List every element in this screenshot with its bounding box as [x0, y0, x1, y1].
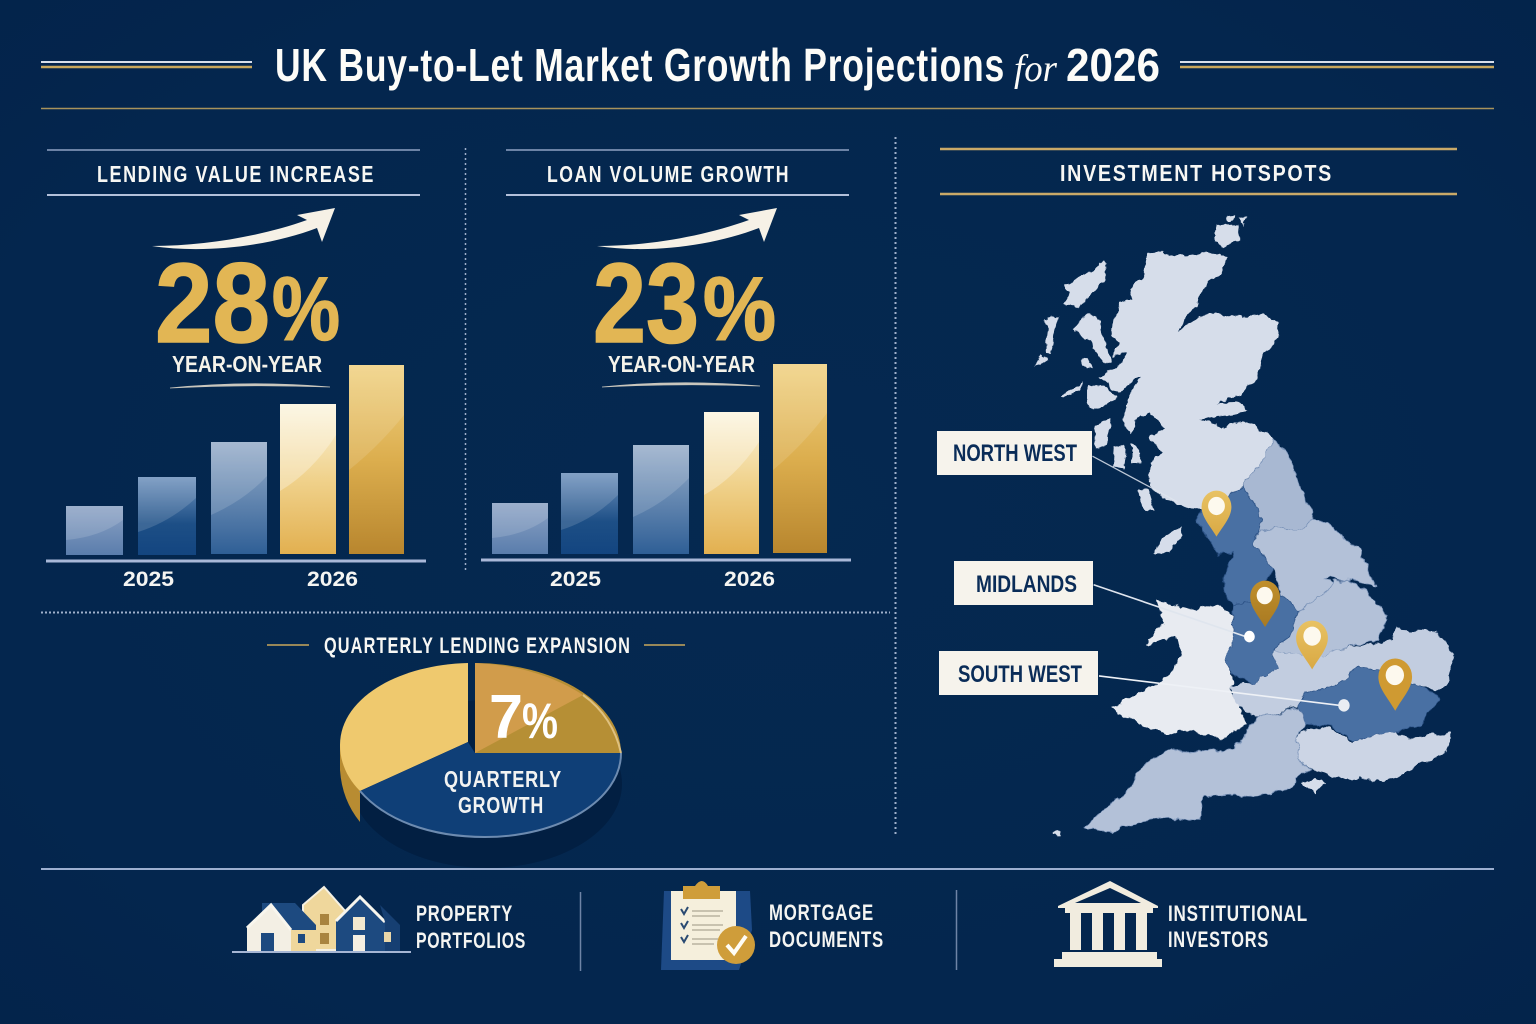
map region: South West [1084, 708, 1309, 831]
panel: quarterly lending expansion [267, 633, 685, 868]
footer: mortgage documents [661, 881, 884, 970]
stat: 28% [155, 240, 340, 366]
text: mortgage documents: MORTGAGE [769, 900, 874, 925]
title: 2026 [1066, 39, 1160, 91]
icon: houses [232, 887, 411, 953]
pin: Midlands [1250, 581, 1280, 627]
title: UK Buy-to-Let Market Growth Projections [275, 39, 1005, 91]
map region: South East coast [1296, 729, 1450, 781]
map: UK [1035, 216, 1455, 835]
map region: London and South East highlighted [1298, 666, 1440, 741]
bar chart: volume [481, 364, 851, 591]
bar chart: lending: 2025 [123, 568, 174, 591]
arrow: lending growth [152, 208, 335, 249]
footer: institutional investors [1054, 881, 1308, 967]
pie chart [340, 663, 622, 868]
bar chart: volume: 2025 [550, 568, 601, 591]
map region: Scotland [1099, 251, 1278, 509]
icon: temple [1054, 881, 1162, 967]
caption: year-on-year: YEAR-ON-YEAR [608, 351, 755, 377]
leader line: Midlands [1094, 585, 1255, 642]
map region: North West highlighted [1197, 486, 1273, 604]
panel: loan volume growth [481, 150, 851, 591]
caption: year-on-year: YEAR-ON-YEAR [172, 351, 322, 377]
map: islands [1035, 216, 1326, 835]
caption: quarterly growth: QUARTERLY [444, 766, 562, 792]
stat: 7% [489, 683, 558, 752]
stat: 23%: % [703, 260, 776, 360]
pin: East Midlands [1296, 621, 1328, 669]
map region: Wales [1111, 601, 1247, 739]
label: North West [937, 431, 1092, 475]
map region: Yorkshire [1254, 519, 1375, 610]
map: land regions [1035, 216, 1455, 835]
text: mortgage documents: DOCUMENTS [769, 927, 884, 952]
leader line: South West [1099, 676, 1350, 712]
label: Midlands: MIDLANDS [976, 571, 1077, 598]
stat: 28%: % [272, 260, 340, 360]
heading: quarterly lending expansion: QUARTERLY LENDING EXPANSION [324, 633, 631, 658]
caption: quarterly growth: GROWTH [458, 792, 544, 818]
text: mortgage documents [769, 900, 884, 952]
text: property portfolios: PROPERTY [416, 901, 513, 926]
label: South West [939, 651, 1098, 695]
stat: 7%: 7 [489, 683, 523, 752]
stat: 7%: % [522, 693, 558, 749]
arrow: volume growth [597, 208, 777, 249]
text: institutional investors [1168, 901, 1308, 952]
text: property portfolios [416, 901, 526, 953]
title: for [1014, 48, 1057, 90]
map region: West Midlands highlighted [1225, 596, 1298, 683]
bar chart: lending: 2026 [307, 568, 358, 591]
bar chart: volume: 2026 [724, 568, 775, 591]
text: institutional investors: INSTITUTIONAL [1168, 901, 1308, 926]
stat: 28%: 28 [155, 240, 270, 366]
panel: lending value increase [46, 150, 426, 591]
heading: investment hotspots: INVESTMENT HOTSPOTS [1060, 160, 1333, 186]
bar chart: lending [46, 365, 426, 591]
text: institutional investors: INVESTORS [1168, 927, 1269, 952]
label: Midlands [954, 561, 1093, 605]
stat: 23%: 23 [593, 240, 699, 366]
pin: South East [1378, 659, 1412, 711]
heading: loan volume growth: LOAN VOLUME GROWTH [547, 161, 790, 187]
map region: East Midlands [1273, 579, 1388, 656]
heading: lending value increase: LENDING VALUE INCREASE [97, 161, 375, 187]
pin: North West [1202, 491, 1231, 537]
panel: investment hotspots [937, 149, 1457, 835]
map region: North East [1243, 438, 1314, 532]
leader line: North West [1092, 456, 1177, 502]
icon: clipboard [661, 881, 755, 970]
footer: property portfolios [232, 887, 526, 953]
label: South West: SOUTH WEST [958, 661, 1082, 688]
stat: 23% [593, 240, 776, 366]
label: North West: NORTH WEST [953, 440, 1077, 467]
text: property portfolios: PORTFOLIOS [416, 928, 526, 953]
map region: East of England [1229, 629, 1455, 718]
caption: quarterly growth [444, 766, 562, 818]
